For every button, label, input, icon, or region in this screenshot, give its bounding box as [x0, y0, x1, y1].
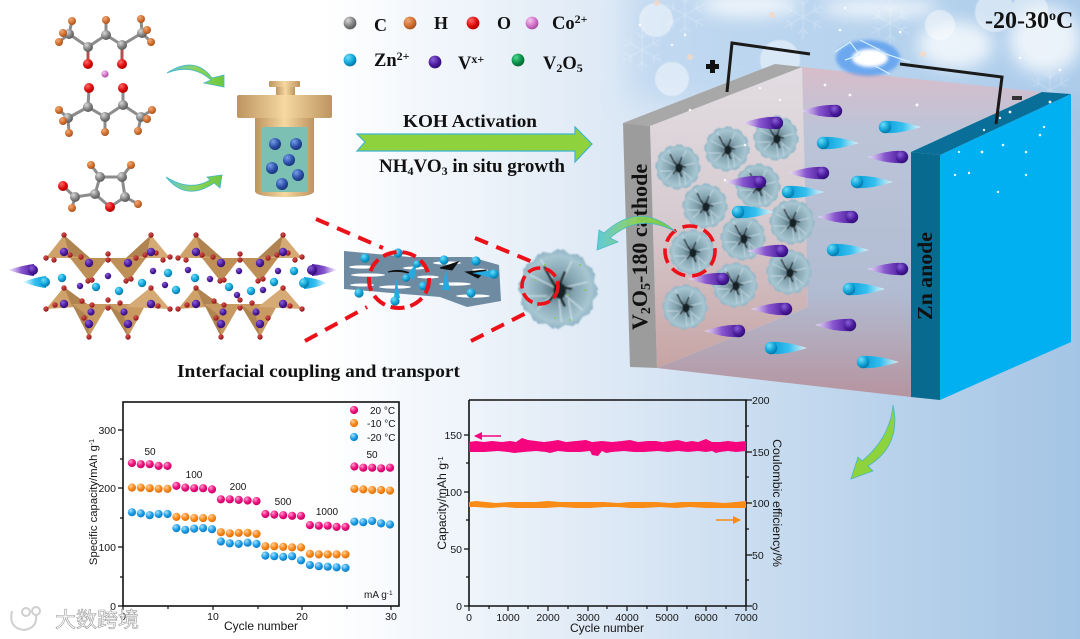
chamber interior — [650, 67, 1042, 397]
label: V2O5-180 cathode: O — [627, 290, 652, 307]
red dashed zoom guides — [305, 219, 547, 341]
series: -20 °C — [128, 508, 394, 572]
legend: 20 °C — [370, 406, 395, 417]
tick labels — [98, 425, 397, 623]
V ion comets — [688, 105, 908, 337]
nanoflower particles on cathode — [652, 112, 818, 333]
tick labels: 4000 — [615, 612, 639, 624]
plus terminal — [706, 60, 719, 73]
temperature range label: C — [1056, 8, 1073, 34]
y axis title left: Capacity/mAh g — [435, 463, 449, 550]
x axis title: Cycle number — [224, 619, 298, 633]
axes — [118, 402, 399, 610]
legend: atoms and ions: 2+ — [575, 12, 588, 26]
legend: atoms and ions: H — [434, 13, 448, 33]
current density labels: 200 — [230, 482, 247, 493]
legend: atoms and ions: 5 — [577, 61, 583, 75]
heading: interfacial coupling and transport: Interfacial coupling and transport — [177, 361, 460, 381]
label: V2O5-180 cathode: -180 cathode — [627, 164, 652, 283]
tick labels: 3000 — [576, 612, 600, 624]
tick labels: 20 — [296, 611, 308, 623]
axes — [464, 400, 752, 611]
tick labels: 0 — [466, 612, 472, 624]
arrow: efficiency axis — [716, 516, 741, 524]
current density labels: 100 — [186, 470, 203, 481]
legend: atoms and ions: Zn — [374, 51, 397, 71]
red dashed circle on particle — [665, 226, 715, 276]
y axis title left: -1 — [436, 456, 445, 463]
legend: -10 °C — [367, 419, 395, 430]
series: 20 °C — [128, 459, 394, 531]
current density labels — [144, 447, 378, 518]
legend: atoms and ions: O — [562, 54, 577, 74]
arrow: battery particle to nanoflower — [597, 216, 676, 250]
watermark text: 大数跨境 — [55, 609, 139, 632]
current density labels: 50 — [144, 447, 156, 458]
arrow: furan to reactor — [166, 175, 222, 191]
tick labels: 7000 — [734, 612, 758, 624]
label: NH4VO3 in situ growth: VO — [414, 156, 442, 177]
snow dots over battery — [639, 7, 1061, 193]
legend: atoms and ions: C — [374, 15, 387, 35]
synthesis arrow — [357, 127, 592, 162]
tick labels: 0 — [110, 601, 116, 613]
tick labels: 200 — [98, 483, 116, 495]
label: NH4VO3 in situ growth: in situ growth — [448, 156, 565, 177]
current density labels: 50 — [366, 450, 378, 461]
external wire — [727, 43, 1002, 124]
series: capacity band — [469, 438, 746, 456]
tick labels: 100 — [752, 498, 770, 510]
legend — [350, 406, 395, 444]
legend: atoms and ions: V — [543, 54, 556, 74]
tick labels: 1000 — [496, 612, 520, 624]
label: Zn anode: Zn anode — [913, 232, 937, 320]
x axis title: Cycle number — [570, 621, 644, 635]
label: V2O5-180 cathode: 5 — [639, 283, 654, 290]
tick labels: 5000 — [655, 612, 679, 624]
current density labels: 1000 — [316, 507, 339, 518]
tick labels: 10 — [207, 611, 219, 623]
legend: atoms and ions: O — [497, 13, 511, 33]
porous nanosheet — [344, 248, 501, 307]
hydrothermal reactor — [237, 81, 332, 197]
tick labels: 50 — [752, 550, 764, 562]
legend: atoms and ions — [344, 12, 588, 75]
label: KOH activation: KOH Activation — [403, 111, 537, 131]
tick labels: 50 — [450, 544, 462, 556]
minus terminal — [1012, 96, 1022, 100]
legend: atoms and ions: V — [458, 54, 471, 74]
watermark icon — [11, 607, 40, 630]
series: coulombic efficiency band — [469, 501, 746, 508]
Zn anode plate — [911, 92, 1071, 400]
label: NH4VO3 in situ growth: 3 — [442, 164, 448, 178]
unit label: mA g — [364, 590, 387, 601]
chart: long cycling — [435, 395, 784, 635]
tick labels: 100 — [444, 487, 462, 499]
winter bokeh and snowflakes — [623, 0, 1080, 144]
arrow: top molecule to reactor — [167, 65, 224, 87]
tick labels: 200 — [752, 395, 770, 407]
unit label: -1 — [387, 590, 393, 597]
legend: atoms and ions: 2+ — [397, 49, 410, 63]
chart: rate capability — [88, 402, 399, 633]
red dashed circle on nanoflower — [522, 268, 558, 304]
tick labels: 0 — [120, 611, 126, 623]
label: V2O5-180 cathode: V — [627, 314, 652, 330]
molecule: furan ring — [58, 161, 142, 212]
V2O5 cathode plate — [623, 64, 802, 368]
current density labels: 500 — [275, 497, 292, 508]
nanoflower particle — [513, 244, 603, 334]
tick labels: 2000 — [536, 612, 560, 624]
y axis title: -1 — [89, 439, 96, 445]
label: NH4VO3 in situ growth: 4 — [408, 164, 414, 178]
tick labels: 0 — [456, 601, 462, 613]
battery cell — [623, 40, 1071, 400]
legend: atoms and ions: 2 — [556, 61, 562, 75]
tick labels: 6000 — [694, 612, 718, 624]
series: -10 °C — [128, 484, 394, 559]
tick labels: 30 — [385, 611, 397, 623]
watermark — [11, 607, 139, 632]
label: V2O5-180 cathode: 2 — [639, 307, 654, 314]
temperature range label: -20-30 — [985, 8, 1049, 34]
temperature range label: o — [1049, 9, 1056, 24]
tick labels: 150 — [752, 447, 770, 459]
legend: atoms and ions: Co — [552, 14, 575, 34]
tick labels: 0 — [752, 601, 758, 613]
spark — [835, 40, 910, 76]
tick labels: 100 — [98, 542, 116, 554]
tick labels: 150 — [444, 430, 462, 442]
Zn ion comets — [732, 121, 921, 368]
arrow: battery to charts — [851, 405, 895, 479]
legend: atoms and ions: x+ — [471, 52, 484, 66]
tick labels — [444, 395, 770, 624]
V2O5 layered structure — [8, 232, 337, 340]
label: NH4VO3 in situ growth: NH — [379, 156, 408, 177]
y axis title: Specific capacity/mAh g — [88, 445, 100, 565]
y axis title right: Coulombic efficiency/% — [770, 439, 784, 567]
legend: -20 °C — [367, 433, 395, 444]
molecule: cobalt acetylacetonate — [55, 15, 156, 137]
tick labels: 300 — [98, 425, 116, 437]
arrow: capacity axis — [474, 432, 501, 440]
